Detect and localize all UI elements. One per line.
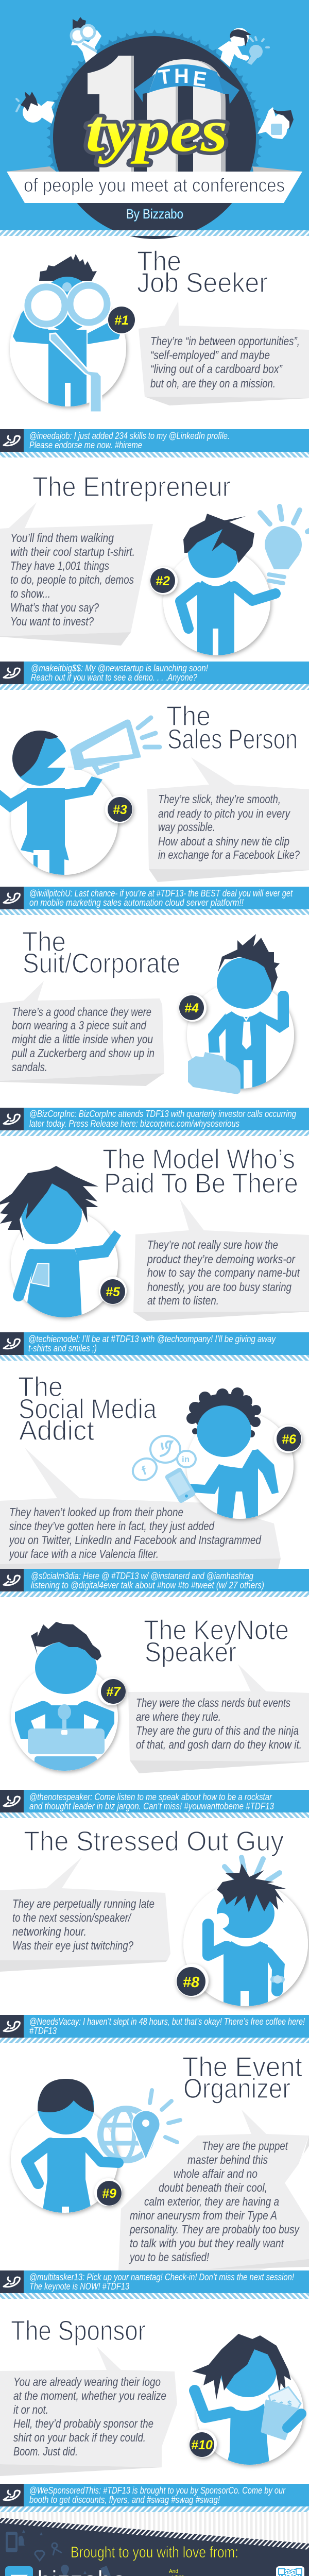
speech bubble: sandals. [12,1060,47,1074]
tweet band 8 [0,2015,309,2043]
speech bubble: They haven’t looked up from their phone [9,1505,183,1519]
badge #2 [150,567,178,595]
speech bubble: minor aneurysm from their Type A [130,2209,277,2222]
speech bubble [128,1664,309,1773]
speech bubble: whole affair and no [174,2167,258,2180]
panel: entrepreneur [0,471,309,659]
speech bubble: are where they rule. [136,1710,221,1723]
speech bubble: your face with a nice Valencia filter. [8,1547,159,1561]
badge #5: #5 [106,1285,121,1299]
tweet band 8: #TDF13 [29,2026,57,2036]
speech bubble: way possible. [158,820,215,834]
speech bubble: but oh, are they on a mission. [150,377,276,390]
speech bubble [0,502,153,646]
badge #6: #6 [282,1432,297,1447]
speech bubble: you on Twitter, LinkedIn and Facebook and Instagrammed [8,1533,262,1547]
badge #9 [94,2178,122,2206]
heading [18,1371,157,1446]
character: stressed guy [176,1857,308,2009]
speech bubble [118,2110,309,2270]
speech bubble: What’s that you say? [10,601,99,614]
badge #1 [107,306,136,334]
text: brought to you: Brought to you with love from: [71,2543,238,2561]
heading [144,1615,289,1668]
speech bubble: They are the puppet [202,2139,288,2153]
tweet band 2 [0,662,309,690]
icon: briefcase [188,1052,241,1094]
word: types: types [85,98,228,164]
header figure: job seeker [71,17,101,65]
panel: keynote speaker [11,1615,309,1773]
icon: money: $ [287,2399,292,2408]
heading: The Event [182,2052,302,2082]
icon: watch [270,1975,285,1984]
speech bubble: You are already wearing their logo [13,2375,161,2388]
speech bubble: with their cool startup t-shirt. [10,545,135,558]
ribbon [134,64,239,104]
character: job seeker [10,254,136,412]
heading: The [166,701,211,732]
icon: globe and pin [100,2090,180,2160]
speech bubble: You want to invest? [10,615,94,628]
speech bubble: They are perpetually running late [12,1897,154,1910]
heading: The [18,1371,63,1402]
speech bubble: born wearing a 3 piece suit and [12,1019,147,1032]
tweet band 5: t-shirts and smiles ;) [28,1343,97,1353]
tweet band 9: The keynote is NOW! #TDF13 [29,2281,129,2292]
badge #9: #9 [102,2187,116,2201]
speech bubble: networking hour. [12,1925,87,1938]
heading: The [22,926,66,957]
tweet band 7 [0,1790,309,1818]
tagline: And [169,2569,178,2574]
panel: job seeker [10,246,309,412]
title banner: of people you meet at conferences [24,175,285,196]
tweet band 2: @makeitbig$$: My @newstartup is launching soon! [31,663,208,673]
QR code [276,2566,304,2576]
tweet band 6: listening to @digital4ever talk about #how #to #tweet (w/ 27 others) [31,1580,264,1590]
badge #10 [189,2430,217,2458]
speech bubble: pull a Zuckerberg and show up in [11,1046,154,1060]
byline: By Bizzabo [126,206,183,222]
speech bubble: it or not. [13,2403,48,2416]
speech bubble: at them to listen. [147,1294,219,1307]
tweet band 9 [0,2270,309,2299]
icon: folder [262,2400,297,2439]
character: keynote speaker [11,1622,126,1772]
background icons [6,2530,111,2576]
word: THE: THE [157,65,208,91]
speech bubble: They’re not really sure how the [147,1238,278,1251]
icon: money [269,2387,301,2416]
header figure: stressed guy [16,92,55,124]
big number 10 [88,56,226,172]
heading [22,926,180,979]
tweet band 1: Please endorse me now. #hireme [29,440,142,450]
speech bubble: There’s a good chance they were [12,1005,151,1019]
icon: phone [164,1467,196,1504]
heading [137,246,268,298]
seal circle [53,36,256,239]
panel: stressed out guy [0,1826,308,2009]
speech bubble [0,1448,281,1569]
heading: Speaker [145,1637,236,1668]
icon: phone [31,1263,49,1286]
heading: Job Seeker [137,267,268,298]
badge #7: #7 [106,1685,121,1699]
badge #3 [105,795,133,823]
speech bubble [147,757,309,882]
badge #8 [176,1964,209,1997]
heading: Social Media [19,1394,157,1425]
tweet band 3: on mobile marketing sales automation cloud server platform!! [29,897,244,908]
header figure: event organizer [258,107,294,139]
heading: The KeyNote [144,1615,289,1646]
speech bubble: Was their eye just twitching? [12,1939,133,1952]
speech bubble: Hell, they’d probably sponsor the [13,2417,153,2430]
heading [166,701,298,755]
speech bubble: They have 1,001 things [10,559,109,572]
panel: event organizer [11,2052,309,2270]
badge #4: #4 [184,1001,199,1015]
tweet band 5 [0,1332,309,1361]
heading: The Stressed Out Guy [24,1826,284,1857]
speech bubble [0,981,164,1086]
speech bubble: to the next session/speaker/ [12,1911,132,1924]
icon: social bubbles: f [140,1464,149,1478]
speech bubble: since they’ve gotten here in fact, they just added [9,1519,215,1533]
footer panel [0,2512,309,2576]
panel: social media addict [0,1371,302,1569]
tweet band 3 [0,887,309,915]
character: entrepreneur [150,506,309,659]
speech bubble: shirt on your back if they could. [13,2431,146,2444]
character: model [0,1166,127,1319]
heading [182,2052,302,2104]
title banner [7,166,302,203]
tweet band 6 [0,1569,309,1597]
panel: sales person [0,701,309,882]
icon: podium and microphone [28,1704,105,1754]
speech bubble: calm exterior, they are having a [144,2195,279,2208]
speech bubble [0,2347,177,2476]
badge #8: #8 [183,1974,200,1991]
speech bubble [0,1857,170,1972]
speech bubble: might die a little inside when you [12,1032,153,1046]
badge #6 [274,1425,302,1453]
badge #1: #1 [114,313,129,328]
tweet band 4 [0,1108,309,1136]
character: social media addict [129,1387,302,1525]
heading [102,1144,298,1199]
heading: Organizer [183,2073,290,2104]
tagline [142,2569,273,2576]
panel: model [0,1144,309,1321]
icon: social bubbles: in [182,1454,190,1464]
speech bubble [139,301,309,405]
heading: The [137,246,181,277]
panel: sponsor [0,2315,303,2476]
speech bubble: You’ll find them walking [10,531,114,545]
sawtooth seal [46,29,263,172]
speech bubble: doubt beneath their cool, [159,2181,267,2194]
header figure: entrepreneur [218,28,269,67]
tweet band 1 [0,429,309,457]
character: suit [179,934,294,1094]
speech bubble: Boom. Just did. [13,2445,78,2458]
badge #2: #2 [156,574,170,588]
icon: megaphone [70,718,160,775]
character: sponsor [189,2334,303,2468]
speech bubble: you to be satisfied! [129,2250,209,2264]
speech bubble: at the moment, whether you realize [13,2389,166,2402]
speech bubble: master behind this [187,2153,268,2166]
badge #5 [99,1277,127,1304]
badge #4 [179,994,207,1022]
speech bubble: They’re slick, they’re smooth, [158,792,281,806]
heading: The Sponsor [11,2315,146,2346]
speech bubble: to show... [10,587,50,600]
speech bubble: to do, people to pitch, demos [10,573,134,586]
speech bubble: to talk with you but they really want [130,2236,284,2250]
heading: The Entrepreneur [32,471,231,502]
heading: Suit/Corporate [23,948,180,979]
speech bubble [133,1199,309,1321]
badge #3: #3 [113,803,127,817]
icon: money: $ [272,2398,277,2407]
speech bubble: “living out of a cardboard box” [150,362,283,376]
tweet band 6: @s0cialm3dia: Here @ #TDF13 w/ @instanerd and @iamhashtag [31,1571,253,1581]
character: event organizer [11,2079,180,2217]
icon: money: $ [279,2400,284,2409]
speech bubble: “self-employed” and maybe [150,348,270,362]
icon: light bulb [260,506,309,583]
badge #10: #10 [191,2438,213,2452]
tweet band 10: booth to get discounts, flyers, and #swag #swag #swag! [29,2495,220,2505]
heading: Addict [19,1415,94,1446]
tweet band 10 [0,2484,309,2512]
panel: suit corporate [0,926,294,1094]
character: sales person [0,718,160,881]
header panel [0,0,309,239]
icon: social bubbles [129,1436,196,1484]
badge #7 [98,1677,126,1705]
tweet band 2: Reach out if you want to see a demo. . . .Anyone? [31,672,197,683]
tweet band 4: later today. Press Release here: bizcorpinc.com/whysoserious [29,1118,239,1129]
tweet band 1: @ineedajob: I just added 234 skills to my @LinkedIn profile. [29,431,230,441]
